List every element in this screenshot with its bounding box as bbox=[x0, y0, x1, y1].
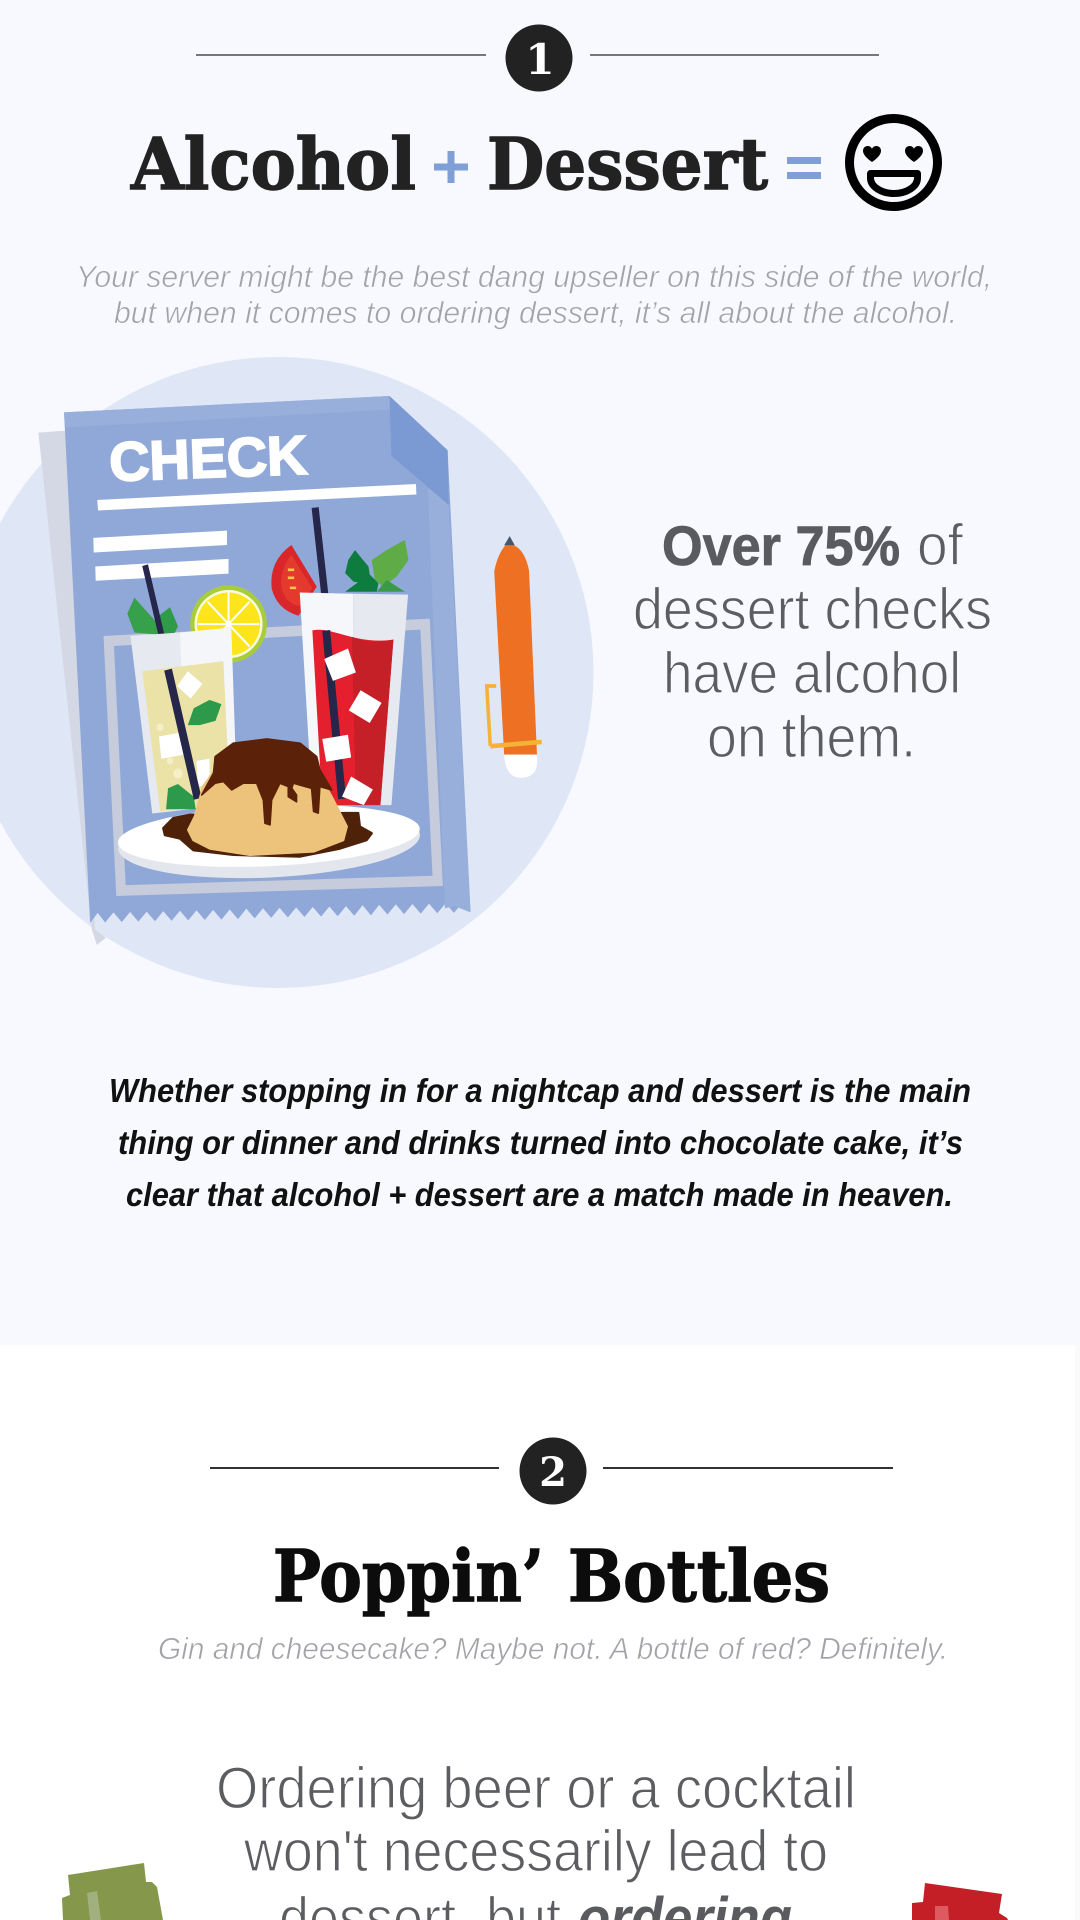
right straw top bbox=[315, 508, 325, 597]
panel: poppin bottles bbox=[0, 1345, 1080, 1920]
callout: over 75%: have alcohol bbox=[663, 641, 961, 706]
right glass bbox=[300, 593, 408, 805]
left glass bbox=[130, 627, 237, 814]
left inner mint bbox=[188, 700, 221, 725]
callout: over 75%: of bbox=[917, 513, 964, 578]
icon: red bottle top bbox=[912, 1883, 1008, 1920]
check paper bbox=[64, 396, 471, 923]
heading: poppin bottles bbox=[273, 1534, 830, 1618]
heading: poppin bottles: Poppin’ bbox=[273, 1534, 544, 1618]
chocolate pool bbox=[163, 813, 372, 856]
icon: heart-eyes smiley bbox=[850, 118, 938, 206]
callout: over 75%: on them. bbox=[707, 705, 916, 770]
section number 1 bbox=[196, 24, 879, 92]
panel: alcohol and dessert bbox=[0, 0, 1080, 1345]
heading: alcohol + dessert = smiley bbox=[130, 118, 937, 206]
illustration: check with drinks and dessert bbox=[0, 357, 594, 988]
check folded corner bbox=[389, 396, 449, 505]
callout: over 75%: dessert checks bbox=[633, 577, 992, 642]
left ice cubes bbox=[177, 671, 202, 699]
body statement bbox=[216, 1756, 856, 1920]
check frame bbox=[109, 624, 438, 891]
chocolate topping bbox=[202, 739, 332, 825]
callout: over 75%: Over 75% bbox=[662, 514, 900, 577]
icon: green bottle top bbox=[62, 1863, 163, 1920]
check title: CHECK bbox=[108, 424, 309, 493]
section number 1: 1 bbox=[525, 35, 555, 84]
lime slice bbox=[190, 585, 267, 663]
body statement: won't necessarily lead to bbox=[243, 1819, 828, 1884]
heading: poppin bottles: Bottles bbox=[568, 1534, 830, 1618]
flan pudding bbox=[188, 770, 347, 855]
check shadow sheet bbox=[38, 430, 106, 945]
bold paragraph bbox=[109, 1072, 971, 1213]
heading: alcohol + dessert = smiley: Dessert bbox=[487, 122, 768, 206]
background circle bbox=[0, 357, 594, 988]
left straw top bbox=[145, 565, 161, 635]
tomato wedge bbox=[271, 545, 317, 616]
right mint bbox=[345, 540, 408, 592]
section number 2: 2 bbox=[539, 1449, 567, 1496]
right ice cubes bbox=[324, 649, 356, 681]
callout: over 75% bbox=[633, 513, 992, 770]
subheading: Gin and cheesecake? Maybe not. A bottle of red? Definitely. bbox=[158, 1631, 948, 1666]
bold paragraph: Whether stopping in for a nightcap and dessert is the main bbox=[109, 1072, 971, 1109]
dessert plate bbox=[117, 799, 421, 884]
left mint bbox=[127, 598, 178, 635]
section number 2 bbox=[210, 1438, 893, 1504]
body statement: Ordering beer or a cocktail bbox=[216, 1756, 856, 1821]
subheading bbox=[76, 259, 992, 330]
bold paragraph: thing or dinner and drinks turned into chocolate cake, it’s bbox=[118, 1124, 963, 1161]
subheading: Your server might be the best dang upseller on this side of the world, bbox=[76, 259, 992, 294]
check lines bbox=[97, 484, 416, 510]
pen bbox=[487, 536, 542, 778]
bold paragraph: clear that alcohol + dessert are a match made in heaven. bbox=[126, 1176, 953, 1213]
subheading: but when it comes to ordering dessert, it’s all about the alcohol. bbox=[114, 295, 957, 330]
heading: alcohol + dessert = smiley: Alcohol bbox=[130, 122, 416, 206]
